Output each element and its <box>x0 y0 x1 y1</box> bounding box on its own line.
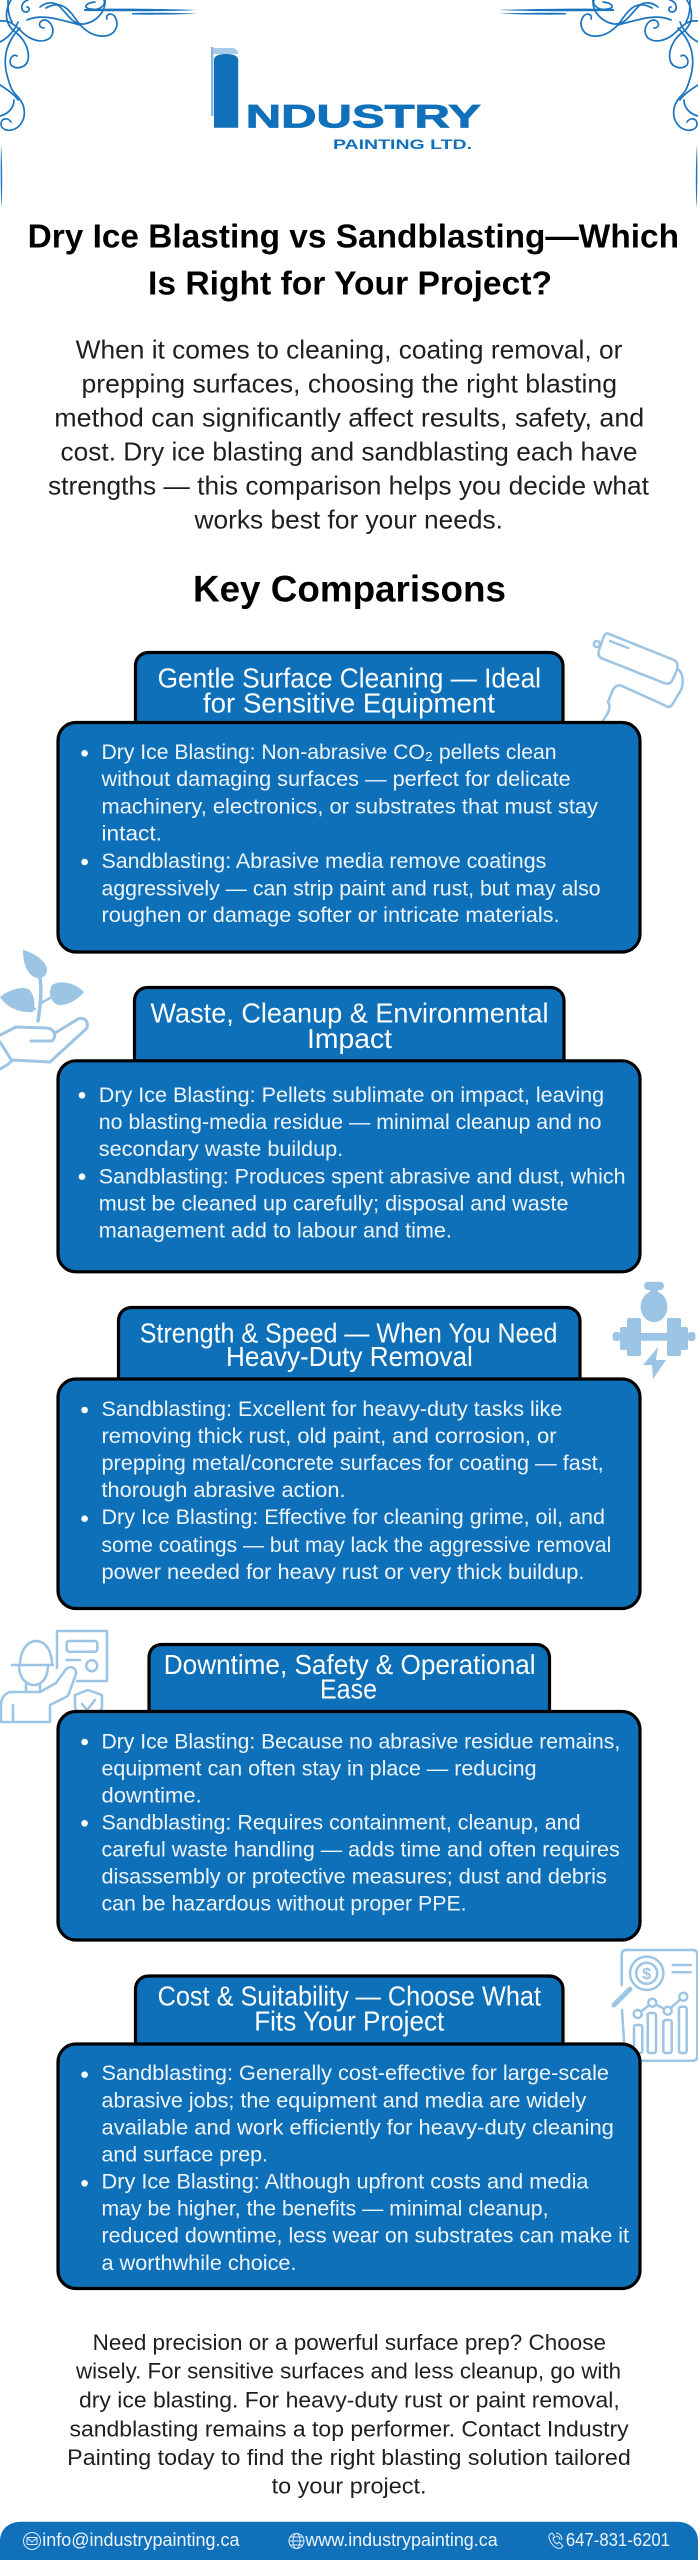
logo: Industry Painting Ltd.: PAINTING LTD. <box>333 136 472 152</box>
panel: gentle surface cleaning <box>58 652 640 952</box>
closing call to action text: sandblasting remains a top performer. Contact Industry <box>70 2416 629 2441</box>
closing call to action text: Need precision or a powerful surface prep? Choose <box>93 2330 606 2355</box>
icon: financial report <box>614 1950 697 2061</box>
panel body: may be higher, the benefits — minimal cleanup, <box>102 2197 548 2221</box>
panel body: Sandblasting: Requires containment, cleanup, and <box>102 1810 580 1834</box>
panel heading tab: Strength & Speed — When You Need <box>140 1317 557 1348</box>
decoration: top-right corner ornament <box>499 0 698 208</box>
title: Dry Ice Blasting vs Sandblasting—Which <box>28 217 679 254</box>
panel body: prepping metal/concrete surfaces for coating — fast, <box>102 1451 604 1475</box>
panel body: Dry Ice Blasting: Although upfront costs and media <box>102 2170 589 2194</box>
icon: paint roller <box>594 633 683 724</box>
panel body: a worthwhile choice. <box>102 2251 296 2275</box>
panel heading tab <box>136 1976 563 2058</box>
intro text block: prepping surfaces, choosing the right blasting <box>82 369 617 399</box>
panel body <box>58 1061 640 1272</box>
panel body: careful waste handling — adds time and often requires <box>102 1838 620 1862</box>
panel body: thorough abrasive action. <box>102 1478 346 1502</box>
panel body: Dry Ice Blasting: Pellets sublimate on impact, leaving <box>99 1083 604 1107</box>
panel: waste, cleanup and environmental impact <box>58 988 640 1272</box>
panel body: must be cleaned up carefully; disposal and waste <box>99 1191 569 1215</box>
closing call to action text: dry ice blasting. For heavy-duty rust or paint removal, <box>79 2388 620 2413</box>
logo building <box>211 47 238 128</box>
panel body: Dry Ice Blasting: Effective for cleaning grime, oil, and <box>102 1505 605 1529</box>
panel: strength and speed <box>58 1308 640 1608</box>
footer contact bar <box>0 2522 698 2560</box>
panel body: aggressively — can strip paint and rust, but may also <box>102 876 601 900</box>
panel heading tab <box>134 988 564 1075</box>
panel heading tab <box>136 652 563 740</box>
intro text block: cost. Dry ice blasting and sandblasting each have <box>60 437 637 467</box>
footer contact bar: www.industrypainting.ca <box>304 2529 498 2550</box>
panel body: Dry Ice Blasting: Non-abrasive CO₂ pellets clean <box>102 740 556 764</box>
panel heading tab: Ease <box>320 1673 377 1704</box>
panel body: reduced downtime, less wear on substrates can make it <box>102 2224 629 2248</box>
panel heading tab: Cost & Suitability — Choose What <box>158 1981 541 2012</box>
intro text block <box>48 335 650 535</box>
panel body <box>58 1712 640 1940</box>
panel body: downtime. <box>102 1783 202 1807</box>
panel heading tab <box>149 1644 550 1725</box>
panel body: some coatings — but may lack the aggressive removal <box>102 1533 611 1557</box>
title <box>28 217 679 302</box>
panel body: power needed for heavy rust or very thick buildup. <box>102 1560 584 1584</box>
panel body <box>58 1379 640 1608</box>
panel body: Sandblasting: Excellent for heavy-duty tasks like <box>102 1397 562 1421</box>
intro text block: strengths — this comparison helps you decide what <box>48 471 650 501</box>
closing call to action text: to your project. <box>272 2474 426 2499</box>
panel: downtime, safety and operational ease <box>58 1644 640 1940</box>
intro text block: When it comes to cleaning, coating removal, or <box>76 335 623 365</box>
closing call to action text <box>67 2330 631 2499</box>
heading: Key Comparisons: Key Comparisons <box>193 569 506 610</box>
panel body <box>58 722 640 952</box>
logo: Industry Painting Ltd. <box>211 47 481 152</box>
icon: phone <box>549 2533 563 2548</box>
decoration: top-left corner ornament <box>0 0 197 208</box>
panel heading tab: Downtime, Safety & Operational <box>164 1649 536 1680</box>
logo: Industry Painting Ltd.: NDUSTRY <box>246 99 481 135</box>
panel body: can be hazardous without proper PPE. <box>102 1892 467 1916</box>
panel body: intact. <box>102 822 162 846</box>
panel body: Sandblasting: Generally cost-effective for large-scale <box>102 2061 609 2085</box>
panel heading tab: Heavy-Duty Removal <box>226 1341 473 1372</box>
panel: cost and suitability <box>58 1976 640 2288</box>
panel heading tab: Gentle Surface Cleaning — Ideal <box>158 663 541 694</box>
panel body: removing thick rust, old paint, and corrosion, or <box>102 1424 556 1448</box>
panel body: Sandblasting: Abrasive media remove coatings <box>102 849 546 873</box>
icon: barbell and energy <box>613 1282 696 1379</box>
panel heading tab: Fits Your Project <box>254 2005 445 2036</box>
icon: plant in hand <box>0 950 87 1069</box>
panel body: abrasive jobs; the equipment and media are widely <box>102 2088 587 2112</box>
panel heading tab: for Sensitive Equipment <box>203 688 495 719</box>
panel heading tab: Impact <box>307 1023 392 1054</box>
panel body: disassembly or protective measures; dust and debris <box>102 1865 607 1889</box>
closing call to action text: Painting today to find the right blasting solution tailored <box>67 2445 631 2470</box>
panel body: available and work efficiently for heavy-duty cleaning <box>102 2115 614 2139</box>
intro text block: method can significantly affect results, safety, and <box>54 403 644 433</box>
panel body: equipment can often stay in place — reducing <box>102 1756 536 1780</box>
panel body: no blasting-media residue — minimal cleanup and no <box>99 1110 602 1134</box>
panel body: Dry Ice Blasting: Because no abrasive residue remains, <box>102 1729 620 1753</box>
panel body: and surface prep. <box>102 2143 268 2167</box>
icon: safety worker <box>1 1631 107 1722</box>
title: Is Right for Your Project? <box>148 265 552 302</box>
icon: financial report: $ <box>642 1966 651 1983</box>
intro text block: works best for your needs. <box>193 505 503 535</box>
icon: email <box>24 2532 40 2550</box>
footer contact bar: info@industrypainting.ca <box>42 2529 240 2550</box>
panel heading tab: Waste, Cleanup & Environmental <box>150 998 548 1029</box>
panel body: roughen or damage softer or intricate materials. <box>102 903 560 927</box>
panel heading tab <box>118 1308 580 1392</box>
panel body <box>58 2044 640 2288</box>
panel body: without damaging surfaces — perfect for delicate <box>100 767 571 791</box>
footer contact bar: 647-831-6201 <box>566 2529 670 2550</box>
icon: globe <box>289 2534 304 2548</box>
panel body: Sandblasting: Produces spent abrasive and dust, which <box>99 1164 626 1188</box>
panel body: machinery, electronics, or substrates that must stay <box>102 794 598 818</box>
panel body: secondary waste buildup. <box>99 1137 343 1161</box>
panel body: management add to labour and time. <box>99 1218 452 1242</box>
closing call to action text: wisely. For sensitive surfaces and less cleanup, go with <box>75 2359 621 2384</box>
